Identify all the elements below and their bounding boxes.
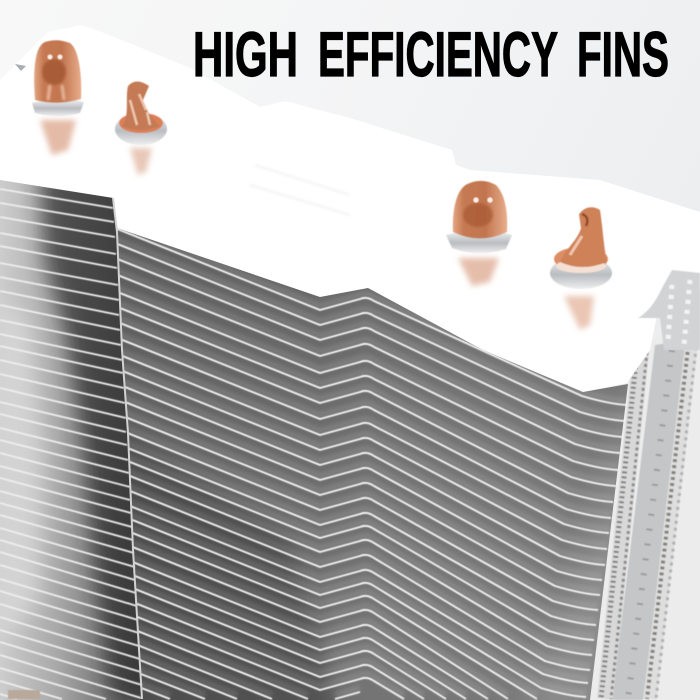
- twisted stem: [122, 82, 160, 130]
- fin lines: left block: [0, 189, 142, 699]
- shading: dark patch on right fin block: [130, 436, 341, 700]
- gap highlight: lighter lower part of each fin gap: [110, 222, 627, 695]
- fin lines: right block: [110, 226, 627, 699]
- stem: [560, 207, 607, 267]
- reflection: [564, 296, 594, 330]
- seam between fin blocks: [113, 198, 142, 699]
- copper cap: [34, 40, 81, 103]
- reflection: [130, 148, 152, 175]
- reflection: [40, 120, 76, 155]
- title: EFFICIENCY: [318, 20, 558, 90]
- pin: twisted copper heat pipe, left: [115, 82, 167, 175]
- pin: bullet copper heat pipe, left: [32, 40, 84, 155]
- right fin stack: folded fin edges: [570, 320, 700, 700]
- plate detail: faint pressed lines: [250, 165, 350, 215]
- shading: pale mist at left edge: [0, 300, 45, 640]
- ring: [446, 230, 512, 253]
- reflection: [458, 258, 499, 286]
- curled fin corner at top right: [638, 270, 700, 350]
- copper base: [554, 247, 608, 271]
- copper cap: [453, 181, 507, 238]
- pin: bullet copper heat pipe, right: [446, 181, 512, 286]
- shading: dark band on left fin block: [26, 184, 143, 700]
- top plate: [0, 25, 700, 392]
- tan spot at bottom left: [8, 690, 40, 699]
- ring: [115, 113, 167, 145]
- pin: crimped copper heat pipe, right: [550, 207, 612, 330]
- ring: [32, 99, 84, 116]
- ring: [550, 257, 612, 289]
- title: HIGH: [193, 20, 298, 90]
- left fin block: [0, 180, 143, 700]
- copper base: [119, 113, 163, 133]
- right fin block: [100, 222, 628, 700]
- plate detail: small mark: [15, 64, 26, 71]
